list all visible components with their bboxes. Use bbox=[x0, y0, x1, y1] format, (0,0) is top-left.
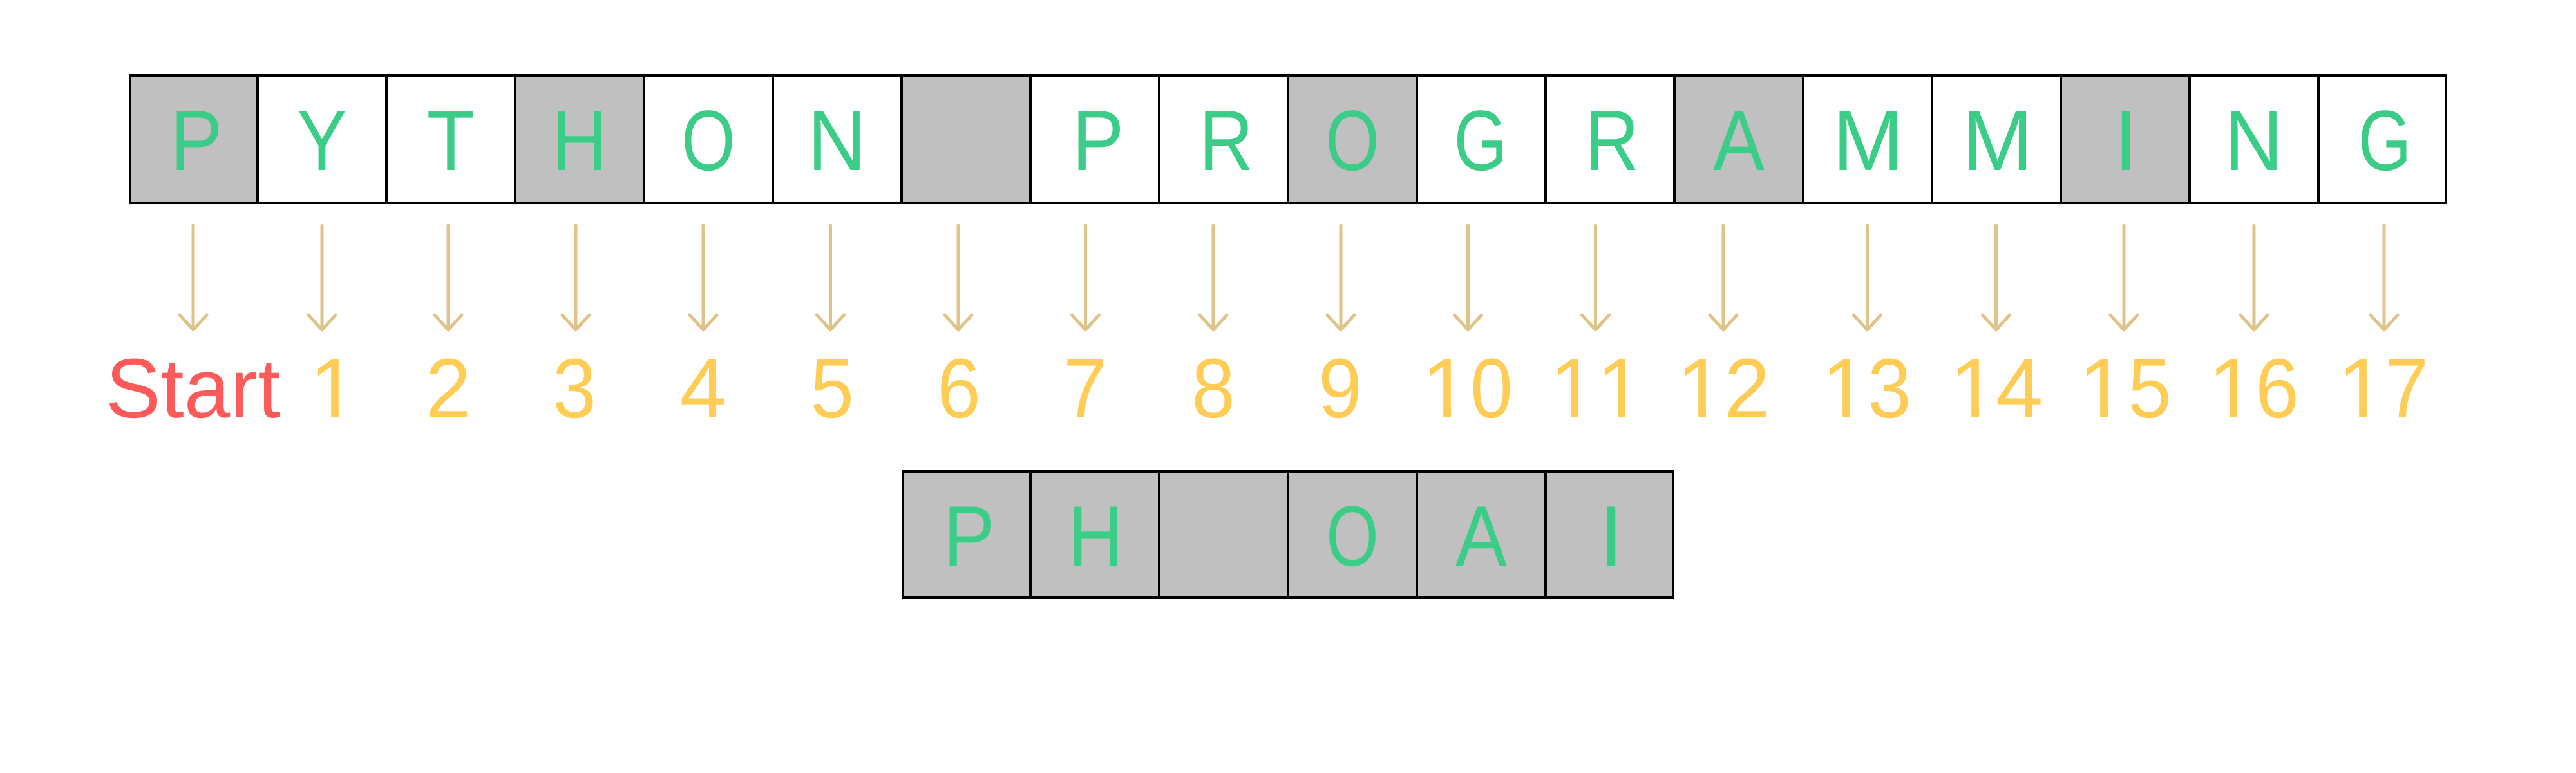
cell: O: O bbox=[681, 92, 735, 189]
arrow: 5 bbox=[817, 225, 844, 330]
cell: T bbox=[386, 75, 515, 203]
label: 16: 6 bbox=[2255, 341, 2299, 435]
label: 9: 9 bbox=[1318, 341, 1362, 435]
cell: M bbox=[1932, 75, 2061, 203]
cell: N: N bbox=[2224, 93, 2283, 189]
cell: H (selected): H bbox=[552, 92, 607, 188]
cell: M: M bbox=[1833, 93, 1904, 189]
arrow: 6 bbox=[945, 225, 972, 330]
label: 15: 5 bbox=[2128, 341, 2172, 435]
arrow: 12 bbox=[1710, 225, 1737, 330]
arrow: 15 bbox=[2110, 225, 2137, 330]
result cell: I: I bbox=[1600, 489, 1623, 584]
cell: O bbox=[644, 75, 773, 203]
label: 13 bbox=[1829, 358, 1908, 419]
cell: O (selected): O bbox=[1325, 92, 1379, 189]
label: 16 bbox=[2217, 358, 2295, 419]
cell: O (selected) bbox=[1288, 75, 1417, 203]
label: 6: 6 bbox=[937, 341, 981, 435]
result cell: O bbox=[1288, 472, 1417, 598]
cell: R bbox=[1546, 75, 1674, 203]
cell: P (selected): P bbox=[171, 93, 222, 188]
label: 17: 7 bbox=[2385, 341, 2429, 435]
label: 5: 5 bbox=[810, 341, 854, 435]
cell: N bbox=[773, 75, 902, 203]
label: 12: 2 bbox=[1725, 341, 1770, 435]
label: 14 bbox=[1958, 359, 2041, 417]
arrow: 11 bbox=[1582, 225, 1609, 330]
arrow: 1 bbox=[308, 225, 336, 330]
result cell: I bbox=[1546, 472, 1673, 598]
index labels bbox=[109, 358, 2425, 419]
label: 10 bbox=[1430, 358, 1510, 419]
label: 17: 1 bbox=[2338, 341, 2385, 435]
label: 11: 1 bbox=[1596, 341, 1643, 435]
label: 8: 8 bbox=[1191, 341, 1235, 435]
arrow: 2 bbox=[435, 225, 462, 330]
arrow: 7 bbox=[1072, 225, 1099, 330]
arrow: 3 bbox=[562, 225, 589, 330]
cell: G: G bbox=[2358, 93, 2411, 189]
cell: I (selected) bbox=[2061, 75, 2190, 203]
arrow: 10 bbox=[1454, 225, 1481, 330]
arrow: 16 bbox=[2240, 225, 2268, 330]
label: 7: 7 bbox=[1063, 341, 1107, 435]
label: 10: 0 bbox=[1470, 341, 1513, 435]
label: 14: 1 bbox=[1950, 341, 1997, 435]
cell: R bbox=[1159, 75, 1288, 203]
label: Start: Start bbox=[106, 341, 281, 435]
label: 12 bbox=[1685, 358, 1766, 417]
arrow: 14 bbox=[1982, 225, 2009, 330]
label: 3: 3 bbox=[553, 341, 596, 435]
cell: M: M bbox=[1962, 93, 2033, 189]
cell: I (selected): I bbox=[2114, 93, 2137, 189]
label: 2: 2 bbox=[426, 341, 471, 435]
cell: H (selected) bbox=[515, 75, 644, 203]
result cell: H bbox=[1030, 472, 1159, 598]
result cell: space bbox=[1159, 472, 1288, 598]
cell: P (selected) bbox=[130, 75, 258, 203]
label: 17 bbox=[2345, 359, 2425, 417]
arrow: start bbox=[180, 225, 207, 330]
cell: G bbox=[2318, 75, 2446, 203]
label: 15: 1 bbox=[2079, 341, 2126, 435]
cell: Y bbox=[258, 75, 386, 203]
arrow: 8 bbox=[1200, 225, 1227, 330]
result cell: H: H bbox=[1068, 488, 1124, 584]
label: 11 bbox=[1557, 359, 1625, 417]
cell: M bbox=[1803, 75, 1932, 203]
top row: source string PYTHON PROGRAMMING bbox=[130, 75, 2446, 203]
arrows from each character to its index bbox=[180, 225, 2398, 330]
cell: N: N bbox=[808, 93, 866, 189]
label: 14: 4 bbox=[1996, 341, 2043, 435]
label: 16: 1 bbox=[2208, 341, 2255, 435]
label: 15 bbox=[2087, 359, 2168, 419]
arrow: 13 bbox=[1853, 225, 1880, 330]
label: 10: 1 bbox=[1422, 341, 1469, 435]
label: 1: 1 bbox=[310, 341, 357, 435]
cell: A (selected): A bbox=[1713, 92, 1765, 188]
label: 13: 3 bbox=[1868, 341, 1911, 435]
cell: A (selected) bbox=[1674, 75, 1803, 203]
cell: R: R bbox=[1585, 93, 1639, 189]
bottom row: result string PH OAI bbox=[903, 472, 1673, 598]
result cell: A: A bbox=[1455, 488, 1507, 584]
cell: space (selected) bbox=[902, 75, 1030, 203]
label: 11: 1 bbox=[1549, 341, 1596, 435]
cell: T: T bbox=[427, 93, 475, 189]
arrow: 17 bbox=[2371, 225, 2398, 330]
cell: N bbox=[2190, 75, 2318, 203]
arrow: 4 bbox=[690, 225, 717, 330]
cell: Y: Y bbox=[297, 93, 347, 189]
cell: G: G bbox=[1454, 93, 1507, 189]
result cell: A bbox=[1417, 472, 1546, 598]
cell: P: P bbox=[1072, 93, 1124, 188]
label: 4: 4 bbox=[680, 341, 726, 435]
result cell: P: P bbox=[943, 488, 995, 584]
cell: P bbox=[1030, 75, 1159, 203]
result cell: P bbox=[903, 472, 1030, 598]
result cell: O: O bbox=[1326, 489, 1379, 584]
cell: G bbox=[1417, 75, 1546, 203]
label: 13: 1 bbox=[1821, 341, 1868, 435]
arrow: 9 bbox=[1327, 225, 1354, 330]
label: 12: 1 bbox=[1677, 341, 1724, 435]
cell: R: R bbox=[1199, 93, 1253, 189]
